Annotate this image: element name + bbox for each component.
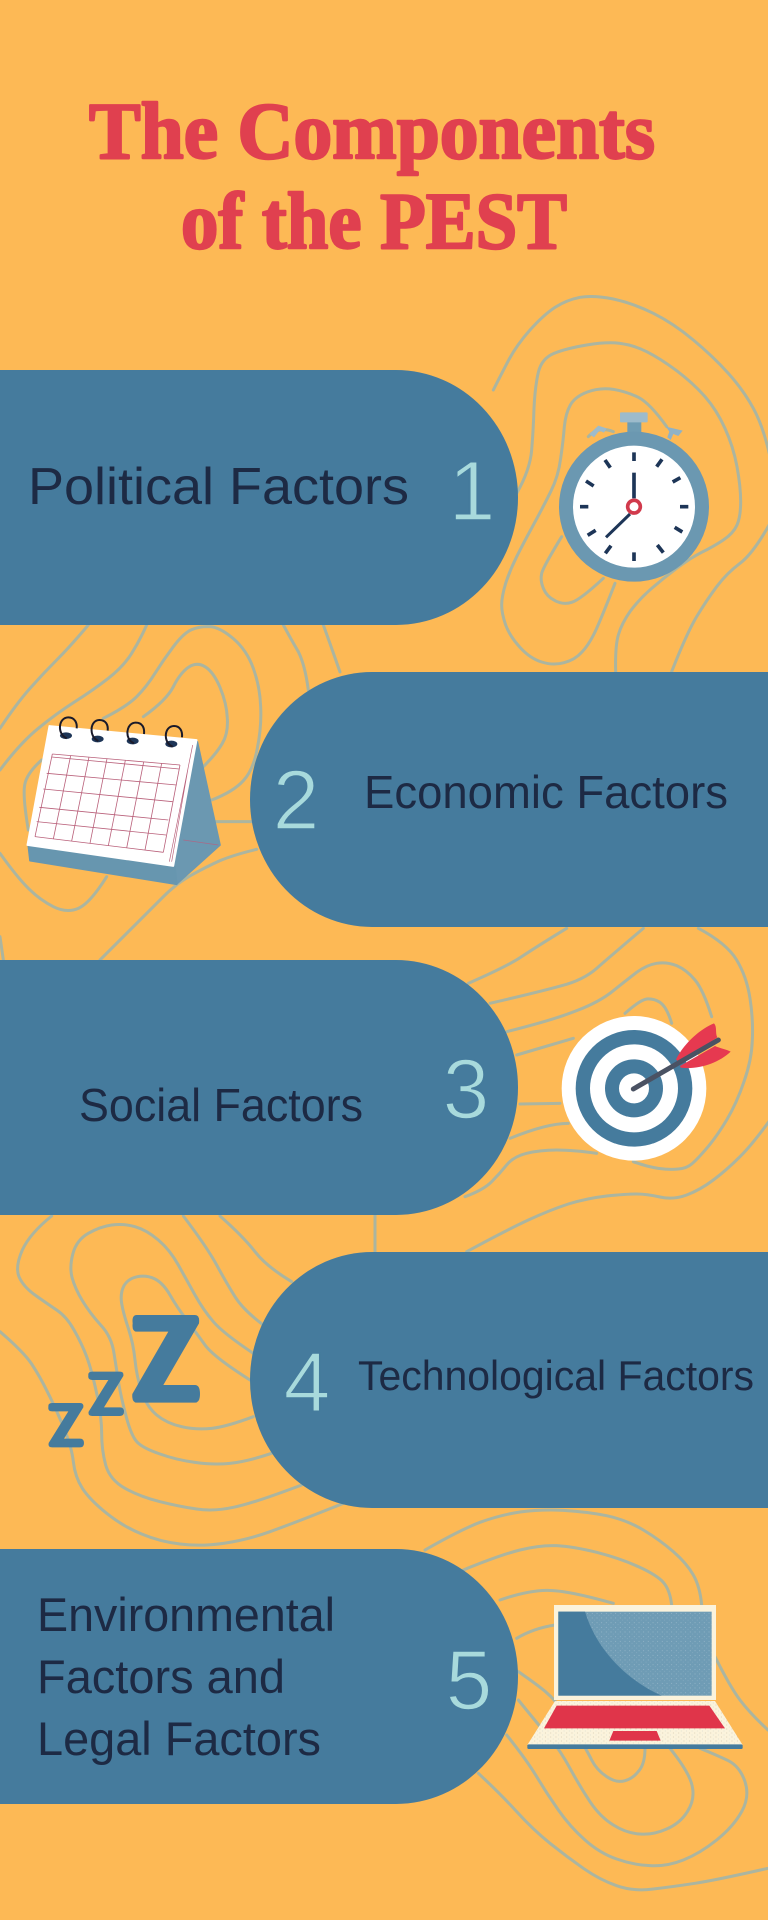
- label: political factors: Political Factors: [28, 458, 409, 516]
- icon: desk calendar: [27, 717, 220, 884]
- icon: laptop: [527, 1605, 743, 1749]
- label: environmental and legal factors: [37, 1588, 335, 1765]
- panel 4: technological factors: [250, 1252, 768, 1508]
- number 3: 3: [443, 1042, 489, 1136]
- panel 5: environmental and legal factors: [0, 1549, 518, 1804]
- title: of the PEST: [181, 178, 567, 266]
- panel 2: economic factors: [250, 672, 768, 927]
- icon: target with arrow: [562, 1016, 731, 1161]
- label: technological factors: Technological Factors: [358, 1352, 754, 1399]
- title: The Components: [89, 88, 655, 176]
- title: [89, 88, 655, 266]
- icon: stopwatch: [559, 412, 709, 582]
- label: social factors: Social Factors: [79, 1079, 363, 1131]
- number 2: 2: [273, 753, 319, 847]
- label: environmental and legal factors: Factors and: [37, 1650, 285, 1703]
- label: environmental and legal factors: Legal Factors: [37, 1712, 321, 1765]
- panel 3: social factors: [0, 960, 518, 1215]
- number 4: 4: [284, 1335, 330, 1429]
- label: economic factors: Economic Factors: [364, 766, 728, 818]
- number 5: 5: [446, 1633, 492, 1727]
- number 1: 1: [449, 444, 495, 538]
- icon: sleeping zzz: [48, 1315, 200, 1447]
- label: environmental and legal factors: Environmental: [37, 1588, 335, 1641]
- panel 1: political factors: [0, 370, 518, 625]
